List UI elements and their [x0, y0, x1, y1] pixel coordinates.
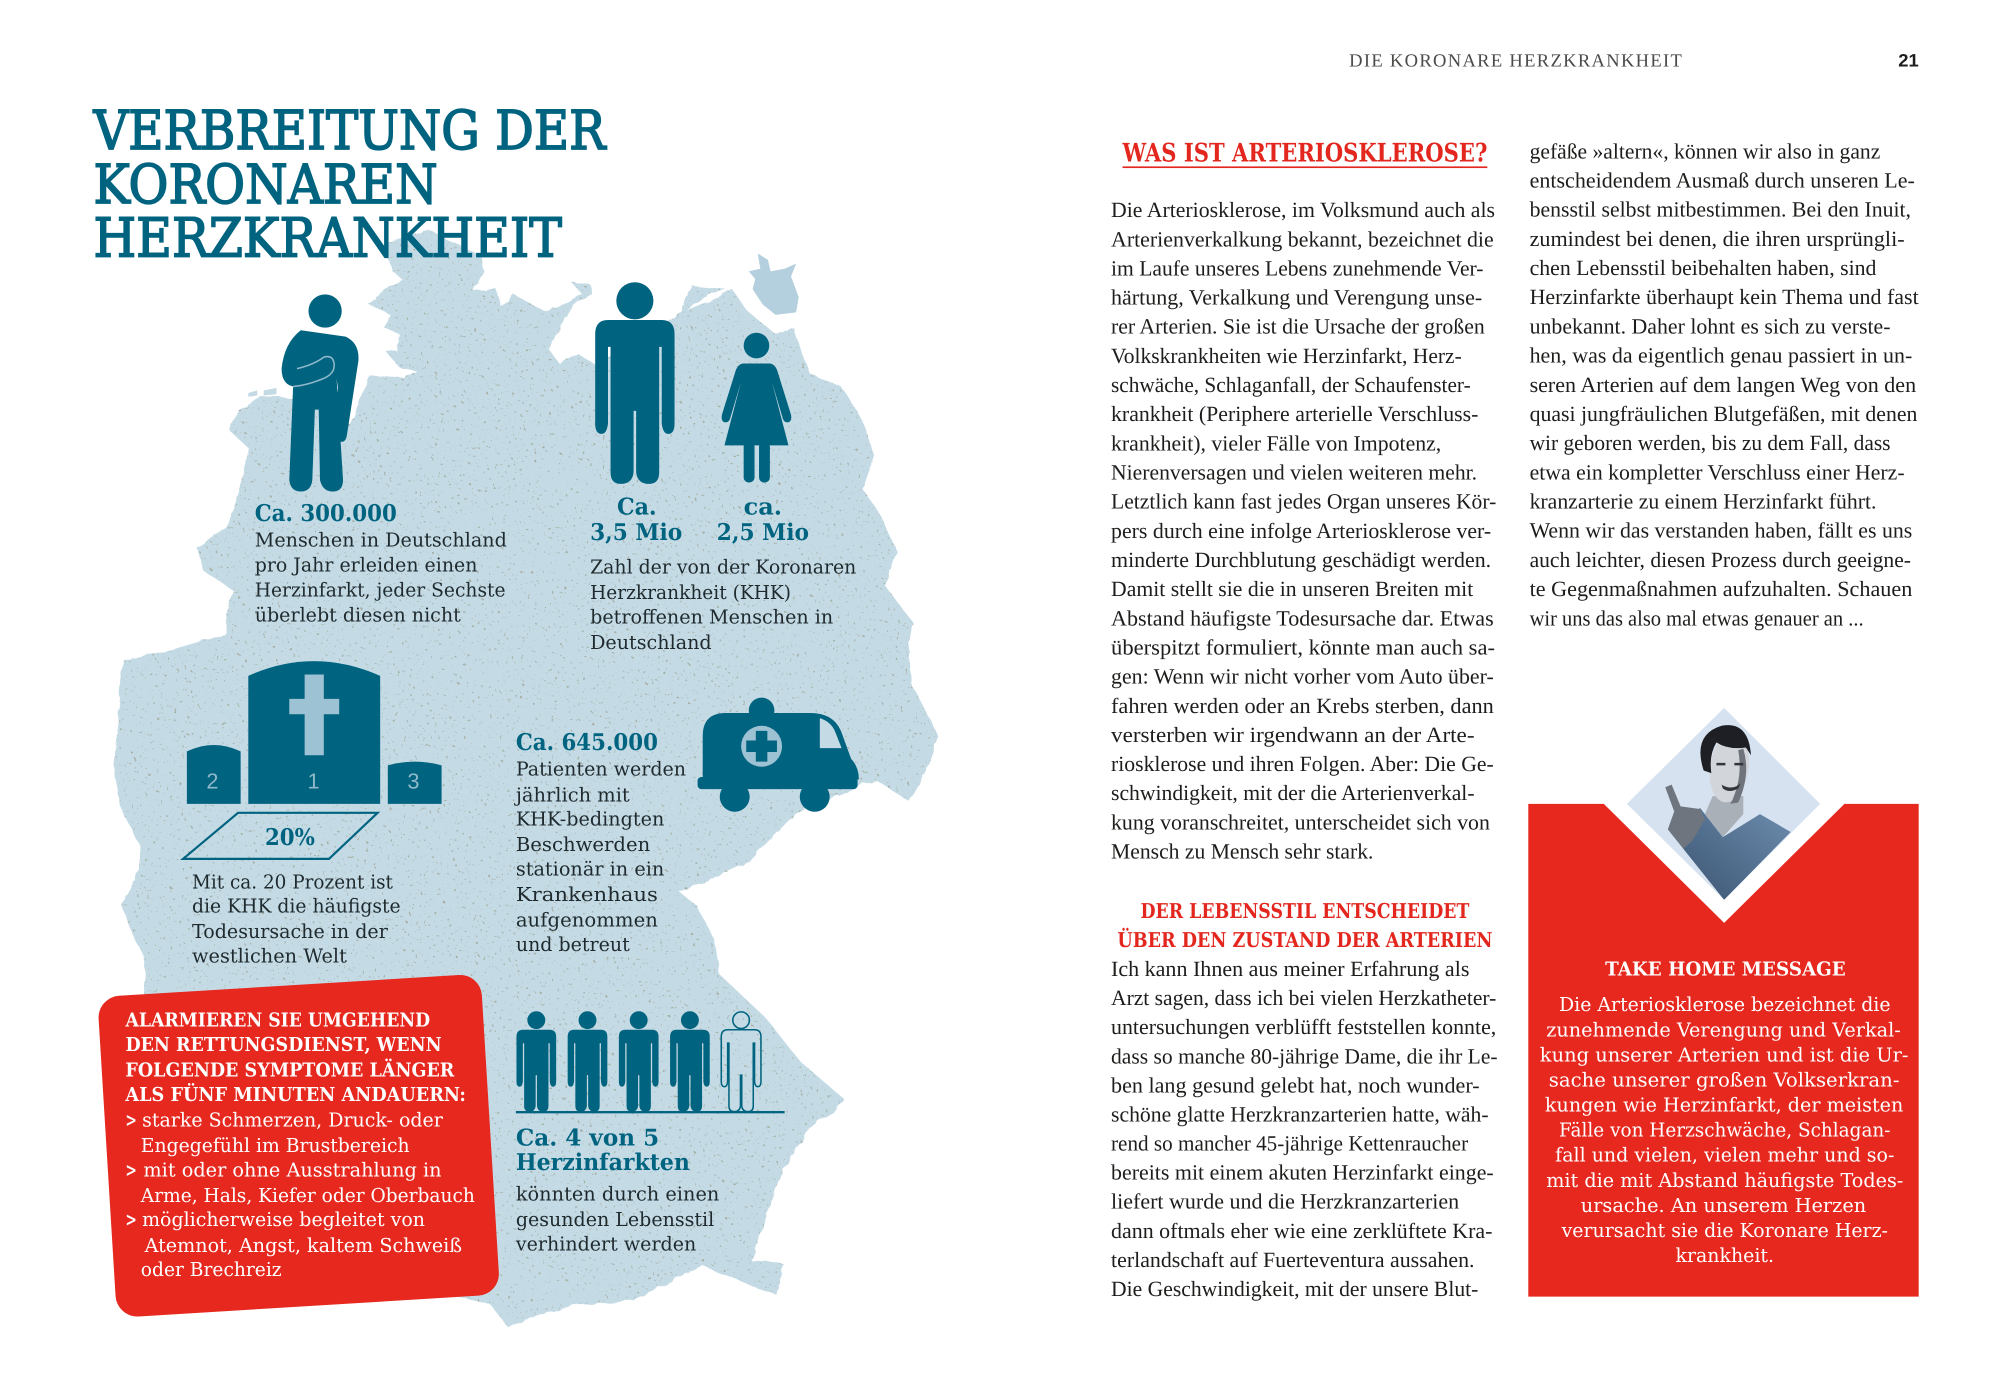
stat: heart attacks: überlebt diesen nicht — [255, 604, 461, 627]
symptom list: oder Brechreiz — [141, 1258, 282, 1281]
red callout box — [97, 974, 500, 1318]
text column 1 continued: dass so manche 80-jährige Dame, die ihr Le- — [1111, 1044, 1498, 1068]
text column 1 continued: rend so mancher 45-jährige Kettenraucher — [1111, 1131, 1469, 1156]
stat: affected people: Zahl der von der Koronaren — [590, 556, 857, 579]
text column 1: krankheit (Periphere arterielle Verschluss- — [1111, 402, 1479, 426]
text column 1: schwindigkeit, mit der die Arterienverkal- — [1111, 781, 1475, 805]
icon: woman — [722, 333, 791, 483]
text column 1 continued: Die Geschwindigkeit, mit der unsere Blut- — [1111, 1277, 1479, 1301]
stat: cause of death: westlichen Welt — [192, 945, 347, 968]
message heading: TAKE HOME MESSAGE — [1605, 957, 1846, 980]
stat: hospital patients: stationär in ein — [516, 858, 665, 881]
stat: cause of death — [192, 870, 401, 968]
message text: fall und vielen, vielen mehr und so- — [1555, 1144, 1894, 1167]
text column 1: Letztlich kann fast jedes Organ unseres Kör- — [1111, 489, 1497, 514]
stat: hospital patients: und betreut — [516, 933, 630, 956]
stat: affected people: Deutschland — [590, 631, 712, 654]
photo: doctor in diamond — [1626, 707, 1823, 901]
warning heading: ALS FÜNF MINUTEN ANDAUERN: — [124, 1082, 466, 1106]
text column 1 continued: liefert wurde und die Herzkranzarterien — [1111, 1189, 1460, 1214]
panel: left page infographic — [92, 99, 947, 1331]
stat: affected people: ca. — [744, 494, 782, 521]
symptom list: Atemnot, Angst, kaltem Schweiß — [143, 1234, 462, 1257]
text column 2: seren Arterien auf dem langen Weg von den — [1530, 373, 1917, 397]
warning heading: ALARMIEREN SIE UMGEHEND — [124, 1009, 430, 1032]
panel: emergency warning — [97, 974, 500, 1318]
message text: Fälle von Herzschwäche, Schlagan- — [1559, 1119, 1891, 1142]
stat: affected people: Herzkrankheit (KHK) — [590, 581, 791, 604]
message text: mit die mit Abstand häufigste Todes- — [1546, 1169, 1903, 1192]
title: KORONAREN — [93, 153, 438, 216]
text column 1: minderte Durchblutung geschädigt werden. — [1111, 548, 1491, 572]
stat: hospital patients: KHK-bedingten — [516, 808, 665, 831]
text column 2 — [1530, 139, 1919, 630]
stat: heart attacks — [255, 500, 507, 627]
text column 2: wir geboren werden, bis zu dem Fall, dass — [1530, 431, 1891, 455]
running header: DIE KORONARE HERZKRANKHEIT — [1349, 51, 1682, 72]
text column 2: Wenn wir das verstanden haben, fällt es uns — [1530, 519, 1912, 543]
text column 1: pers durch eine infolge Arteriosklerose ver- — [1111, 519, 1492, 543]
stat: hospital patients — [513, 730, 686, 956]
text column 1: Die Arteriosklerose, im Volksmund auch als — [1111, 198, 1495, 222]
message text: zunehmende Verengung und Verkal- — [1546, 1018, 1901, 1041]
icon: man — [595, 282, 675, 484]
text column 2: unbekannt. Daher lohnt es sich zu verste- — [1530, 314, 1891, 339]
stat: cause of death: Todesursache in der — [192, 920, 389, 943]
warning heading: FOLGENDE SYMPTOME LÄNGER — [125, 1057, 455, 1082]
icon: tombstones ranking — [183, 661, 442, 859]
text column 2: auch leichter, diesen Prozess durch geeigne- — [1530, 548, 1911, 572]
title — [92, 99, 607, 269]
stat: heart attacks: Ca. 300.000 — [255, 500, 397, 527]
text column 1 continued — [1111, 957, 1498, 1301]
text column 1: Damit stellt sie die in unseren Breiten mit — [1111, 577, 1474, 601]
icon: person holding chest — [282, 294, 358, 492]
text column 1: härtung, Verkalkung und Verengung unse- — [1111, 285, 1483, 310]
text column 2: etwa ein kompletter Verschluss einer Herz- — [1530, 460, 1905, 484]
text column 1: versterben wir irgendwann an der Arte- — [1111, 723, 1475, 747]
message text: kungen wie Herzinfarkt, der meisten — [1545, 1094, 1904, 1117]
symptom list: Arme, Hals, Kiefer oder Oberbauch — [140, 1184, 475, 1207]
symptom list: Engegefühl im Brustbereich — [141, 1134, 410, 1157]
text column 1: Arterienverkalkung bekannt, bezeichnet die — [1111, 227, 1494, 251]
symptom list — [125, 1108, 475, 1281]
symptom list: starke Schmerzen, Druck- oder — [142, 1108, 444, 1132]
text column 1: krankheit), vieler Fälle von Impotenz, — [1111, 431, 1441, 455]
stat: cause of death: Mit ca. 20 Prozent ist — [192, 870, 393, 893]
subheading: Lebensstil: ÜBER DEN ZUSTAND DER ARTERIEN — [1117, 927, 1492, 952]
text column 1: Mensch zu Mensch sehr stark. — [1111, 839, 1373, 864]
symptom list: möglicherweise begleitet von — [142, 1208, 425, 1231]
text column 1: überspitzt formuliert, könnte man auch sa- — [1111, 635, 1495, 660]
icon: row of five people — [516, 1011, 785, 1113]
text column 1 continued: Arzt sagen, dass ich bei vielen Herzkatheter- — [1111, 986, 1497, 1010]
stat: preventable infarctions: gesunden Lebensstil — [516, 1208, 714, 1231]
text column 1: gen: Wenn wir nicht vorher vom Auto über- — [1111, 664, 1494, 689]
text column 1 continued: ben lang gesund gelebt hat, noch wunder- — [1111, 1073, 1480, 1097]
symptom list: mit oder ohne Ausstrahlung in — [143, 1158, 442, 1181]
running header — [1349, 50, 1919, 72]
text column 2: kranzarterie zu einem Herzinfarkt führt. — [1530, 489, 1876, 514]
text column 1: schwäche, Schlaganfall, der Schaufenster- — [1111, 373, 1471, 397]
text column 1: Nierenversagen und vielen weiteren mehr. — [1111, 460, 1477, 485]
stat: heart attacks: Menschen in Deutschland — [255, 529, 507, 552]
text column 1 continued: schöne glatte Herzkranzarterien hatte, wäh- — [1111, 1102, 1489, 1127]
text column 2: te Gegenmaßnahmen aufzuhalten. Schauen — [1530, 577, 1913, 601]
text column 1 continued: bereits mit einem akuten Herzinfarkt einge- — [1111, 1160, 1494, 1185]
text column 2: Herzinfarkte überhaupt kein Thema und fast — [1530, 285, 1919, 309]
title: HERZKRANKHEIT — [93, 207, 562, 269]
text column 1 continued: Ich kann Ihnen aus meiner Erfahrung als — [1111, 957, 1469, 981]
icon: tombstones ranking: 3 — [407, 769, 419, 794]
icon: tombstones ranking: 20% — [265, 824, 315, 851]
map of Germany — [102, 218, 947, 1331]
message text: kung unserer Arterien und ist die Ur- — [1540, 1043, 1908, 1066]
message text: verursacht sie die Koronare Herz- — [1560, 1219, 1888, 1242]
heading: was ist Arteriosklerose: WAS IST ARTERIOSKLEROSE? — [1121, 137, 1487, 168]
text column 1: fahren werden oder an Krebs sterben, dann — [1111, 694, 1494, 718]
text column 1 — [1111, 198, 1497, 864]
text column 2: zumindest bei denen, die ihren ursprüngli- — [1530, 227, 1905, 251]
text column 1 continued: dann oftmals eher wie eine zerklüftete Kra- — [1111, 1219, 1493, 1243]
stat: cause of death: die KHK die häufigste — [192, 895, 401, 918]
text column 2: hen, was da eigentlich genau passiert in un- — [1530, 343, 1913, 368]
text column 1 continued: terlandschaft auf Fuerteventura aussahen. — [1111, 1248, 1475, 1272]
subheading: Lebensstil: DER LEBENSSTIL ENTSCHEIDET — [1140, 899, 1470, 923]
panel: take home message — [1528, 707, 1919, 1297]
message text: krankheit. — [1675, 1244, 1774, 1267]
text column 2: chen Lebensstil beibehalten haben, sind — [1530, 256, 1877, 280]
stat: heart attacks: Herzinfarkt, jeder Sechste — [255, 579, 506, 602]
message text: ursache. An unserem Herzen — [1581, 1194, 1867, 1217]
text column 1: kung voranschreitet, unterscheidet sich von — [1111, 810, 1491, 835]
text column 2: quasi jungfräulichen Blutgefäßen, mit denen — [1530, 402, 1918, 426]
stat: hospital patients: jährlich mit — [513, 783, 630, 806]
message text: Die Arteriosklerose bezeichnet die — [1559, 993, 1891, 1016]
stat: preventable infarctions: verhindert werden — [515, 1233, 697, 1256]
text column 1: rer Arterien. Sie ist die Ursache der großen — [1111, 314, 1485, 339]
stat: preventable infarctions: könnten durch einen — [516, 1183, 720, 1206]
text column 2: gefäße »altern«, können wir also in ganz — [1530, 139, 1881, 163]
stat: heart attacks: pro Jahr erleiden einen — [255, 554, 478, 577]
stat: affected people: 3,5 Mio — [590, 520, 682, 547]
warning heading: DEN RETTUNGSDIENST, WENN — [125, 1033, 442, 1056]
text column 2: wir uns das also mal etwas genauer an ... — [1530, 606, 1864, 630]
text column 2: entscheidendem Ausmaß durch unseren Le- — [1530, 168, 1915, 193]
text column 1: Abstand häufigste Todesursache dar. Etwas — [1111, 606, 1494, 630]
text column 1: Volkskrankheiten wie Herzinfarkt, Herz- — [1111, 344, 1462, 368]
icon: tombstones ranking: 1 — [308, 769, 320, 794]
warning heading — [124, 1009, 466, 1106]
stat: affected people: Ca. — [617, 494, 657, 521]
red box with notch — [1528, 804, 1919, 1297]
stat: hospital patients: Krankenhaus — [516, 883, 658, 906]
symptom list: > — [125, 1108, 137, 1132]
stat: affected people — [590, 494, 857, 654]
text column 1: im Laufe unseres Lebens zunehmende Ver- — [1111, 256, 1484, 281]
stat: preventable infarctions — [515, 1125, 720, 1256]
stat: affected people: betroffenen Menschen in — [590, 605, 834, 628]
symptom list: > — [125, 1158, 137, 1181]
stat: hospital patients: Beschwerden — [516, 833, 651, 856]
message text — [1540, 993, 1908, 1267]
subheading: Lebensstil — [1117, 899, 1492, 952]
stat: preventable infarctions: Herzinfarkten — [516, 1149, 690, 1176]
stat: hospital patients: aufgenommen — [516, 909, 658, 932]
stat: preventable infarctions: Ca. 4 von 5 — [516, 1125, 659, 1152]
stat: affected people: 2,5 Mio — [717, 520, 809, 547]
icon: ambulance — [698, 698, 859, 812]
symptom list: > — [125, 1208, 137, 1231]
text column 1: riosklerose und ihren Folgen. Aber: Die Ge- — [1111, 752, 1494, 776]
stat: hospital patients: Ca. 645.000 — [516, 730, 658, 756]
title: VERBREITUNG DER — [92, 99, 607, 162]
icon: tombstones ranking: 2 — [206, 769, 219, 794]
stat: hospital patients: Patienten werden — [516, 758, 686, 781]
message text: sache unserer großen Volkserkran- — [1549, 1069, 1899, 1092]
text column 2: bensstil selbst mitbestimmen. Bei den Inuit, — [1530, 198, 1911, 222]
page number: 21 — [1898, 50, 1919, 70]
text column 1 continued: untersuchungen verblüfft feststellen konnte, — [1111, 1015, 1496, 1039]
